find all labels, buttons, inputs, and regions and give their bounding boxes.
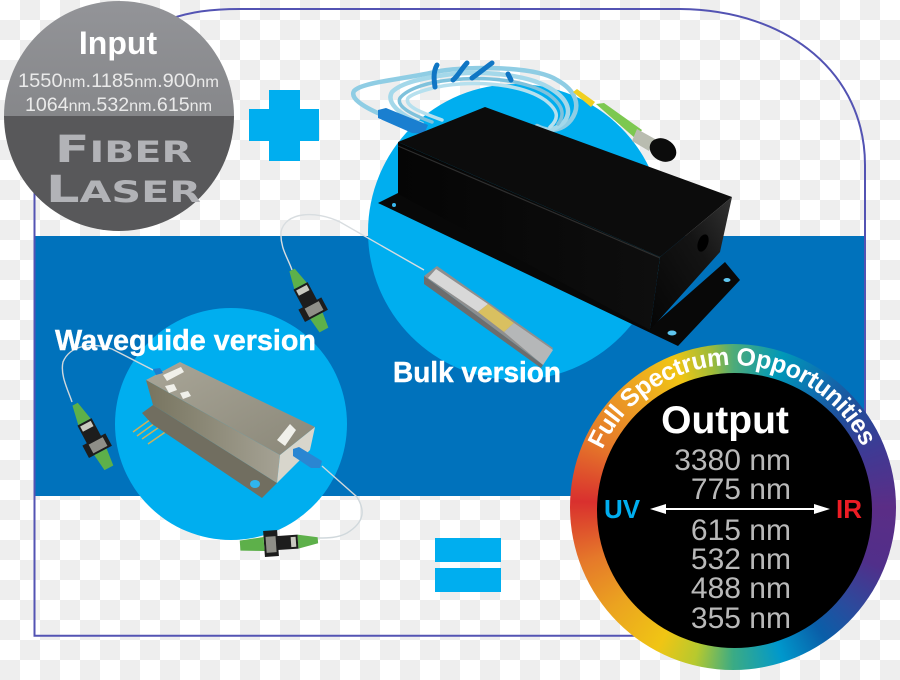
input wavelengths: 1064nm.532nm.615nm [25,94,212,116]
IR label: IR [836,494,862,524]
waveguide version label: Waveguide version [55,325,316,357]
equals sign [435,538,501,592]
bulk version label: Bulk version [393,357,561,389]
cable blue boot [378,108,428,134]
input wavelengths: 1550nm.1185nm.900nm [18,70,219,92]
output wavelengths [674,444,791,635]
output wavelengths: 3380 nm [674,444,791,477]
bulk fiber cable [353,63,576,130]
bulk silver module [424,266,553,368]
output wavelengths: 488 nm [691,572,791,605]
left fiber connector [64,398,120,474]
output wavelengths: 775 nm [691,473,791,506]
black bulk laser box [378,107,740,346]
fiber laser label: F IBER [55,128,192,171]
bulk version circle [368,84,664,380]
black core [597,373,872,648]
rainbow ring [570,344,896,670]
UV label: UV [604,494,641,524]
output heading: Output [661,399,789,442]
gold pins [133,414,174,444]
output spectrum circle [570,344,896,670]
bottom fiber connector [239,527,319,559]
fiber laser label: L ASER [46,168,201,211]
output wavelengths: 532 nm [691,543,791,576]
blue wrap [434,63,511,87]
waveguide silver module [133,362,322,498]
waveguide version circle [115,308,347,540]
input fiber laser circle [4,1,234,232]
full spectrum arc text: Full Spectrum Opportunities [588,348,872,448]
bulk module fiber [281,215,424,270]
plus sign [249,90,319,161]
fiber laser label [46,128,201,211]
top fiber connector [281,264,335,336]
blue band [35,236,865,496]
output wavelengths: 355 nm [691,602,791,635]
double arrow [650,504,830,514]
output wavelengths: 615 nm [691,514,791,547]
input wavelengths [18,70,219,116]
waveguide fibers [62,345,362,538]
input heading: Input [79,25,157,61]
green yellow connector [573,89,681,167]
